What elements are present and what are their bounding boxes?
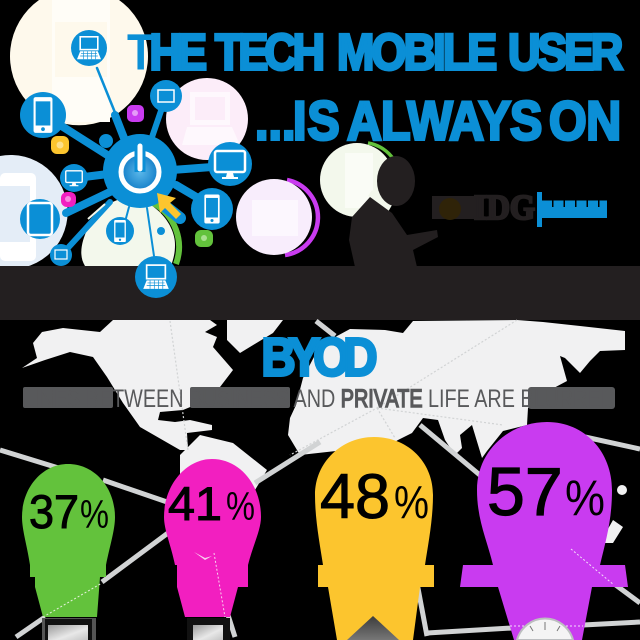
dark band <box>0 266 640 320</box>
value <box>29 485 109 538</box>
title: ALWAYS <box>347 90 542 151</box>
bulb: green 37% <box>22 464 115 640</box>
value <box>487 454 605 530</box>
dotted map routes <box>170 320 517 455</box>
title: IS <box>293 90 340 151</box>
value <box>168 477 255 530</box>
title <box>127 25 623 151</box>
title: ... <box>255 90 296 151</box>
heading: BYOD: BYOD <box>261 327 378 387</box>
logo: IDG: IDG <box>474 188 535 227</box>
value: 48 <box>320 462 390 532</box>
pale device circles <box>0 0 394 269</box>
world map <box>22 320 627 543</box>
device <box>187 618 230 640</box>
bulb: pink 41% <box>164 459 261 640</box>
value: 37 <box>29 485 79 538</box>
center power button <box>99 134 177 235</box>
bulb: yellow 48% <box>315 437 434 640</box>
person silhouette <box>349 156 438 267</box>
value: 41 <box>168 477 222 530</box>
device <box>347 616 399 640</box>
value: % <box>565 470 605 526</box>
value <box>320 462 429 532</box>
value: % <box>80 493 109 537</box>
network lines <box>0 321 640 637</box>
device nodes <box>20 30 252 298</box>
title: THE <box>127 25 207 81</box>
value: % <box>226 485 255 529</box>
connectors <box>60 68 212 256</box>
device <box>42 618 96 640</box>
value: % <box>394 476 429 528</box>
hub network <box>20 30 252 298</box>
bulb: purple 57% <box>460 422 628 640</box>
value: 57 <box>487 454 563 530</box>
logo: IDG <box>432 188 607 227</box>
cursor arrow <box>157 193 181 219</box>
title: USER <box>508 25 623 81</box>
title: MOBILE <box>337 25 497 81</box>
icon: watch <box>517 619 573 640</box>
light edge strip <box>88 204 105 219</box>
coloured dots <box>127 105 144 122</box>
title: ON <box>549 90 621 151</box>
title: TECH <box>215 25 325 81</box>
